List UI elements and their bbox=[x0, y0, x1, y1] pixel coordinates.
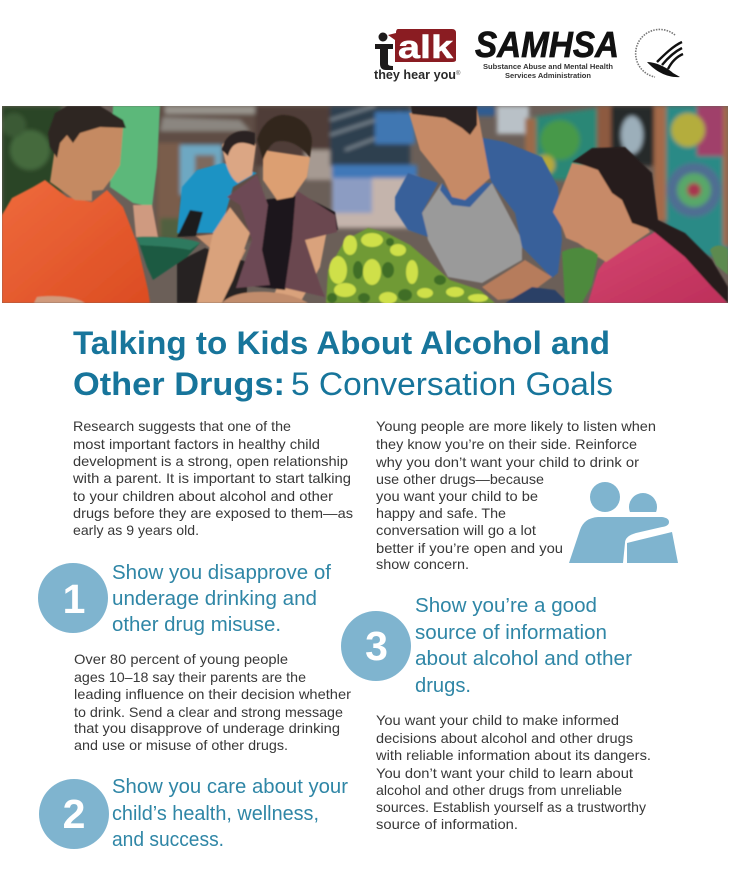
goal 2 text: they know you’re on their side. Reinforce bbox=[376, 437, 637, 452]
title: Talking to Kids About Alcohol and bbox=[73, 325, 610, 361]
goal 1 text: and use or misuse of other drugs. bbox=[74, 738, 288, 753]
woman: face and neck bbox=[553, 163, 650, 262]
background: building bbox=[155, 106, 260, 241]
text block: introduction: to your children about alcohol and other bbox=[73, 489, 334, 504]
goal 1 heading: underage drinking and bbox=[112, 588, 317, 610]
logo: SAMHSA: Substance Abuse and Mental Health bbox=[483, 62, 613, 71]
man: gray shirt body bbox=[422, 183, 522, 283]
title: 5 Conversation Goals bbox=[291, 366, 613, 402]
goal 1 badge bbox=[38, 563, 108, 633]
person: man in blue shirt bbox=[177, 163, 257, 233]
goal 1 text bbox=[74, 652, 351, 753]
icon: parent with arm around child bbox=[569, 482, 678, 563]
goal 3 text: source of information. bbox=[376, 817, 518, 832]
goal 3 badge: 3 bbox=[365, 623, 388, 669]
letter i / t figure bbox=[375, 32, 393, 70]
logo: HHS seal bbox=[636, 29, 683, 77]
goal 1 heading: other drug misuse. bbox=[112, 614, 281, 636]
logo: SAMHSA: SAMHSA bbox=[475, 24, 619, 65]
goal 3 heading: drugs. bbox=[415, 675, 471, 697]
man: head bbox=[409, 108, 490, 200]
goal 2 text: happy and safe. The bbox=[376, 506, 506, 521]
goal 1 text: to drink. Send a clear and strong message bbox=[74, 705, 343, 720]
goal 2 heading: and success. bbox=[112, 829, 224, 851]
text block: introduction: development is a strong, open relationship bbox=[73, 454, 348, 469]
goal 2 text bbox=[375, 419, 656, 572]
girl: head bbox=[263, 150, 310, 200]
goal 1 heading bbox=[112, 562, 331, 636]
girl: arms bbox=[197, 207, 250, 303]
background: fence bbox=[330, 106, 410, 166]
goal 3 text: decisions about alcohol and other drugs bbox=[376, 731, 633, 746]
goal 1 badge: 1 bbox=[63, 576, 85, 622]
goal 2 heading: child’s health, wellness, bbox=[112, 803, 319, 825]
goal 3 text bbox=[375, 713, 651, 832]
text block: introduction: with a parent. It is important to start talking bbox=[72, 471, 351, 486]
goal 3 text: sources. Establish yourself as a trustworthy bbox=[376, 800, 646, 815]
boy: orange shirt bbox=[2, 180, 150, 303]
logo: SAMHSA: Services Administration bbox=[505, 71, 591, 80]
goal 3 text: You don’t want your child to learn about bbox=[376, 766, 633, 781]
man: forearm and pants bbox=[482, 260, 552, 300]
goal 2 text: why you don’t want your child to drink or bbox=[375, 455, 640, 470]
title bbox=[73, 325, 613, 402]
title: Other Drugs: bbox=[73, 366, 285, 402]
background: trees left bbox=[2, 106, 62, 216]
text block: introduction bbox=[72, 419, 353, 538]
goal 2 badge: 2 bbox=[63, 791, 85, 837]
goal 3 text: You want your child to make informed bbox=[376, 713, 619, 728]
goal 3 heading bbox=[415, 595, 632, 697]
goal 2 heading bbox=[112, 776, 348, 851]
logo: talk they hear you: alk bbox=[398, 29, 453, 65]
goal 2 text: you want your child to be bbox=[376, 489, 538, 504]
goal 2 text: conversation will go a lot bbox=[376, 523, 536, 538]
logo: SAMHSA bbox=[475, 24, 619, 80]
text block: introduction: most important factors in healthy child bbox=[73, 437, 320, 452]
girl: black tee and plaid vest bbox=[255, 196, 339, 291]
goal 1 text: leading influence on their decision whether bbox=[74, 687, 351, 702]
goal 1 heading: Show you disapprove of bbox=[112, 562, 331, 584]
goal 3 heading: about alcohol and other bbox=[415, 648, 632, 670]
goal 2 text: use other drugs—because bbox=[376, 472, 544, 487]
goal 2 text: better if you’re open and you bbox=[376, 541, 563, 556]
goal 3 heading: Show you’re a good bbox=[415, 595, 597, 617]
logo: talk they hear you: they hear you bbox=[374, 68, 456, 82]
woman: hair and ponytail bbox=[572, 147, 728, 303]
back plants bbox=[562, 248, 598, 303]
text block: introduction: drugs before they are exposed to them—as bbox=[73, 506, 353, 521]
boy: head bbox=[50, 122, 123, 201]
text block: introduction: Research suggests that one of the bbox=[73, 419, 291, 434]
man: blue sleeves bbox=[395, 173, 438, 237]
logo: talk they hear you bbox=[374, 29, 461, 82]
logo: talk they hear you: ® bbox=[456, 70, 461, 77]
goal 3 text: with reliable information about its dangers. bbox=[375, 748, 651, 763]
goal 3 heading: source of information bbox=[415, 622, 607, 644]
goal 2 heading: Show you care about your bbox=[112, 776, 348, 798]
goal 1 text: Over 80 percent of young people bbox=[74, 652, 288, 667]
goal 2 text: show concern. bbox=[376, 557, 469, 572]
tomato plant bbox=[326, 228, 495, 304]
goal 1 text: that you disapprove of underage drinking bbox=[74, 721, 340, 736]
goal 3 text: alcohol and other drugs from unreliable bbox=[376, 783, 622, 798]
goal 2 text: Young people are more likely to listen when bbox=[376, 419, 656, 434]
speech bubble bbox=[388, 29, 456, 62]
goal 2 badge bbox=[39, 779, 109, 849]
photo: family gardening bbox=[2, 106, 728, 304]
background: between figures bbox=[255, 106, 330, 166]
goal 1 text: ages 10–18 say their parents are the bbox=[74, 670, 306, 685]
wheelbarrow bbox=[137, 237, 200, 280]
woman: pink shirt bbox=[588, 232, 727, 303]
text block: introduction: early as 9 years old. bbox=[73, 523, 199, 538]
goal 3 badge bbox=[341, 611, 411, 681]
person: green shirt bbox=[110, 106, 160, 207]
background: murals bbox=[526, 108, 598, 180]
